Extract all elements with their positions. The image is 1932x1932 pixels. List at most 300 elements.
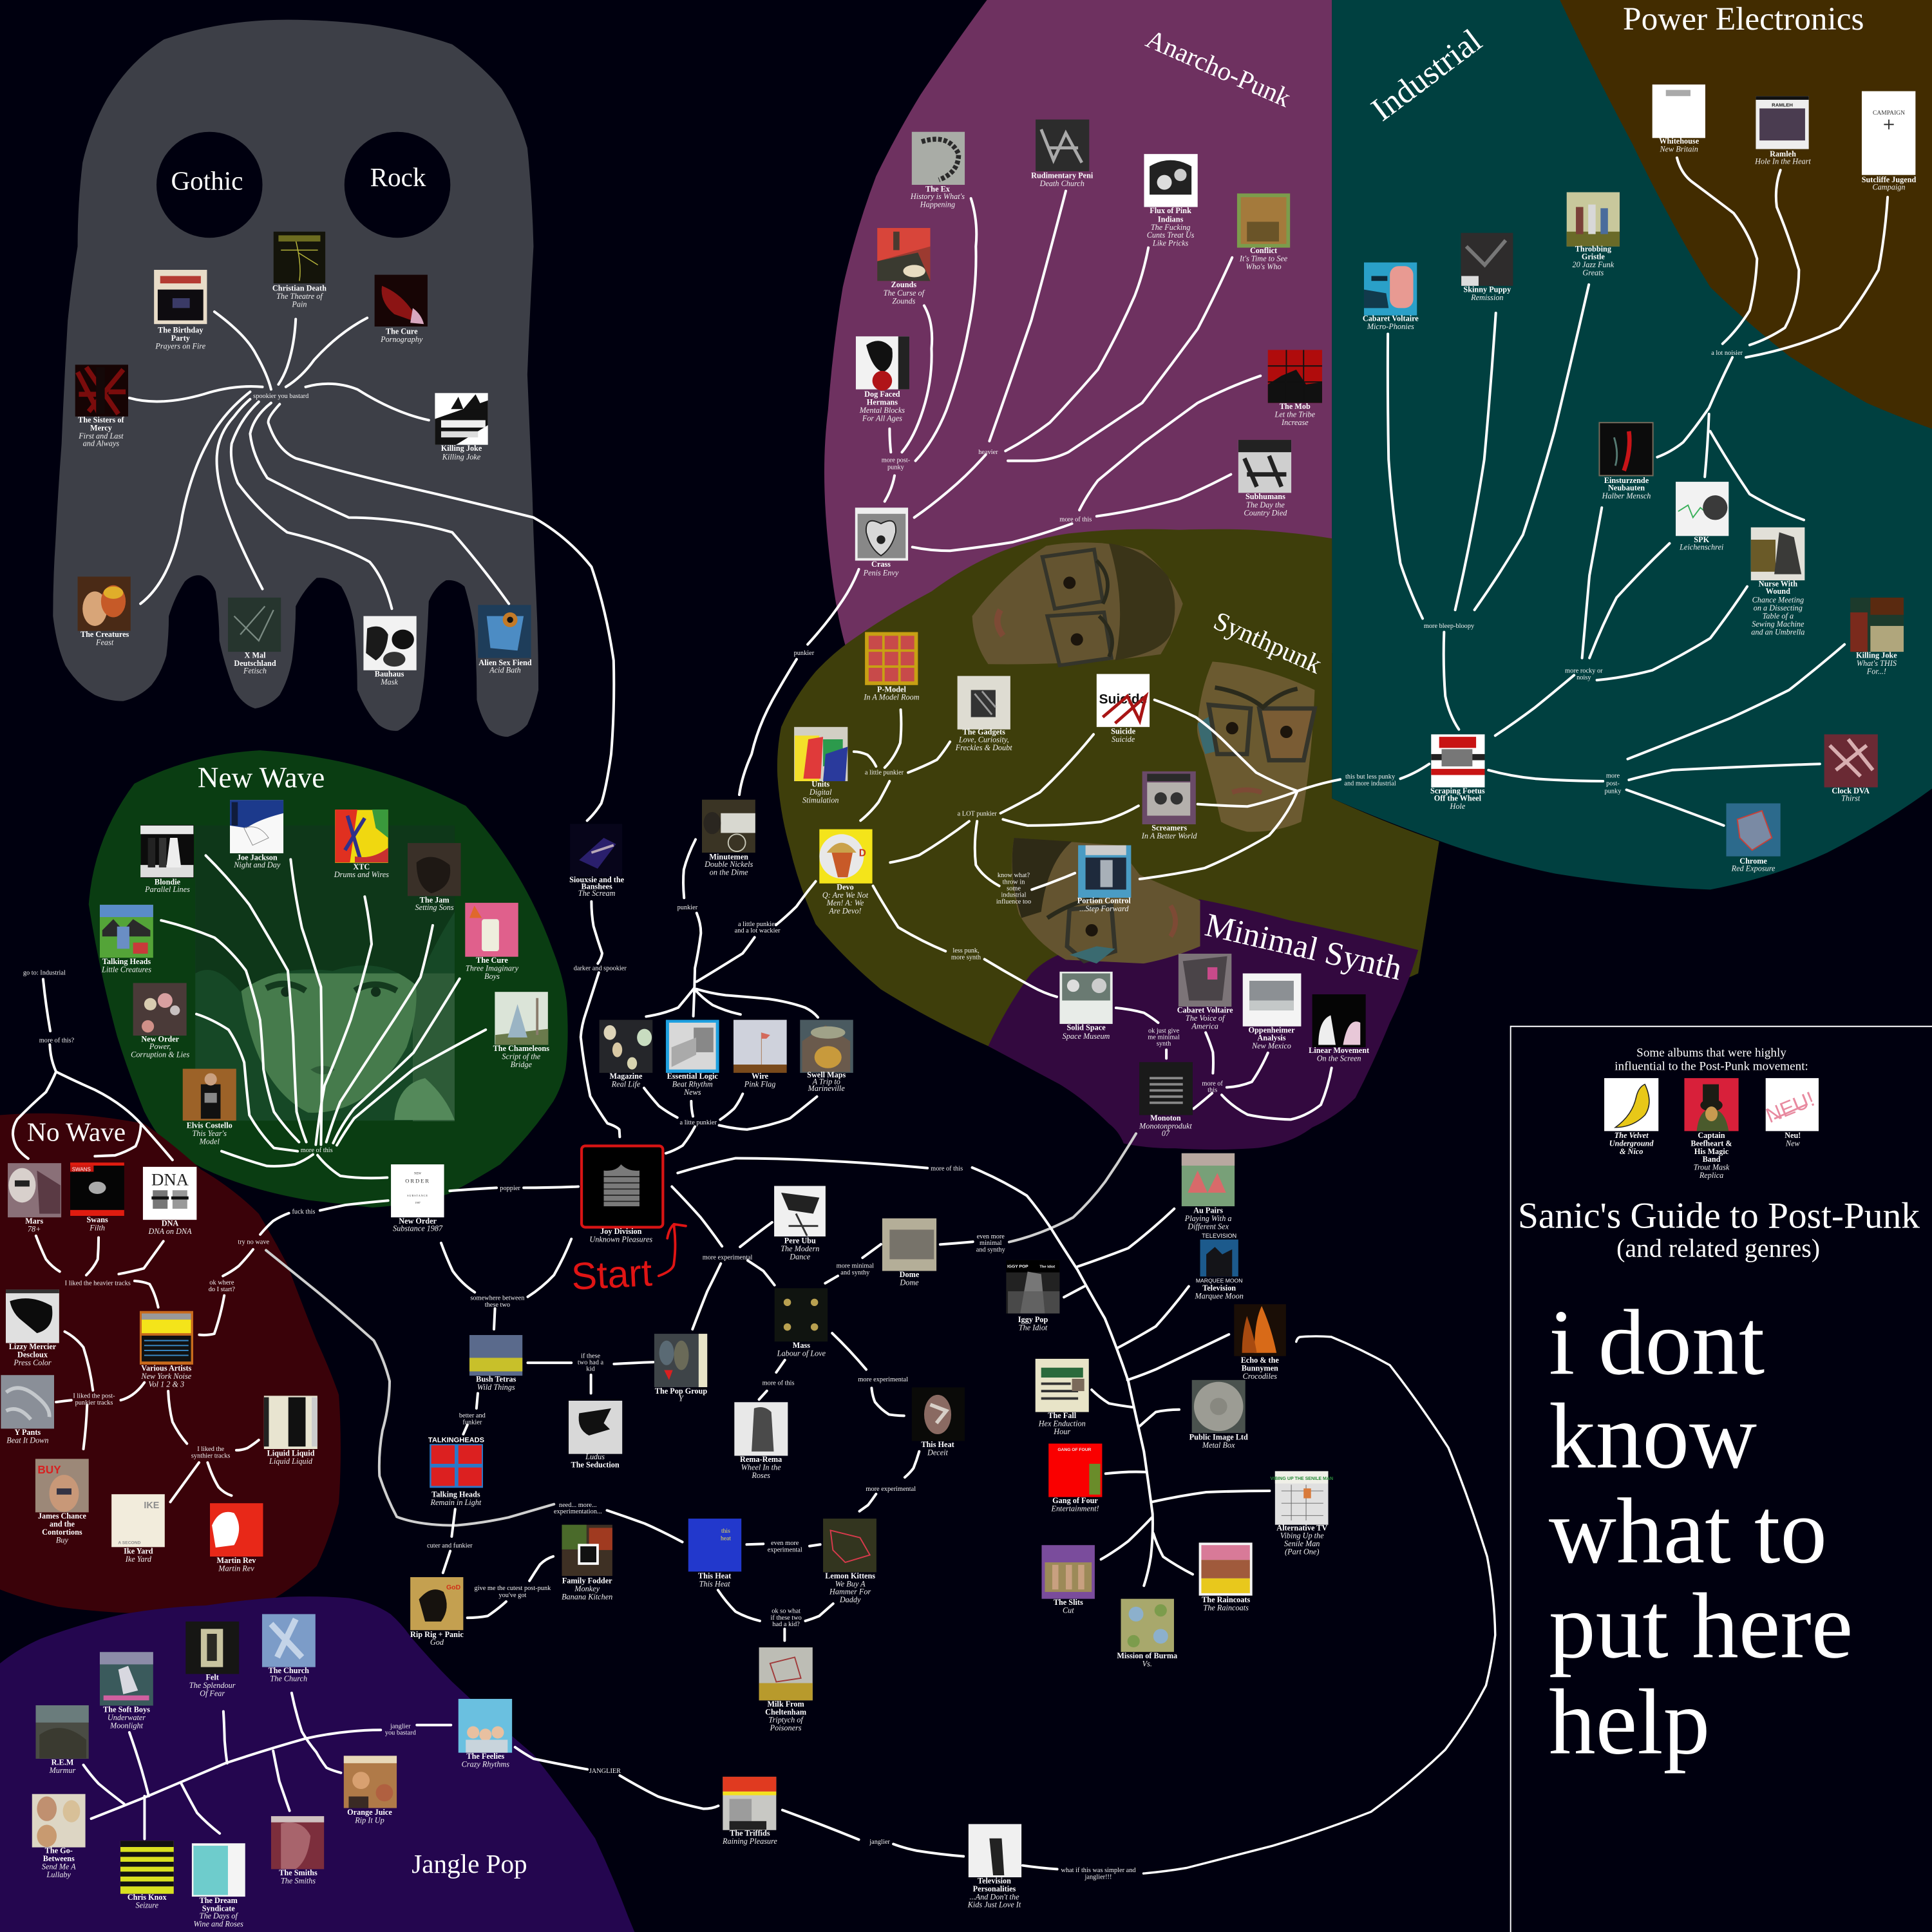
album: Y Pants: Y Pants	[15, 1428, 41, 1437]
album: Swell Maps	[800, 1020, 853, 1093]
album: Chris Knox: Chris Knox	[128, 1893, 167, 1902]
album: Suicide: Suicide	[1111, 726, 1136, 735]
album: Liquid Liquid: Liquid Liquid	[267, 1449, 315, 1458]
album: Neu!	[1763, 1078, 1819, 1148]
album: XTC	[334, 810, 389, 879]
album: Liquid Liquid: Liquid Liquid	[269, 1457, 313, 1466]
album: Rudimentary Peni: Rudimentary Peni	[1031, 171, 1094, 180]
album: X Mal Deutschland: Fetisch	[243, 667, 267, 676]
album: The Velvet Underground and Nico: The Velvet	[1615, 1131, 1649, 1140]
node: ok so what if these two had a kid?: ok so what	[772, 1607, 800, 1615]
album: Nurse With Wound: Chance Meeting	[1752, 596, 1804, 605]
heading: Industrial: Industrial	[1365, 23, 1488, 128]
album: Rip Rig + Panic: Rip Rig + Panic	[410, 1630, 464, 1639]
title: Sanic's Guide to Post-Punk	[1518, 1196, 1920, 1236]
album: Conflict: It's Time to See	[1239, 254, 1288, 263]
album: Christian Death: Christian Death	[272, 284, 327, 293]
album: Pere Ubu: Dance	[789, 1252, 811, 1261]
album: The Dream Syndicate: Syndicate	[202, 1904, 235, 1913]
panel: guide frame	[1511, 1027, 1932, 1932]
album: Alternative TV: (Part One)	[1285, 1548, 1319, 1557]
node: ok so what if these two had a kid?: if these two	[771, 1615, 802, 1622]
album: Gang of Four: Entertainment!	[1050, 1504, 1099, 1513]
album: Killing Joke, What's THIS For: For...!	[1866, 667, 1886, 676]
album: Dog Faced Hermans: Dog Faced	[864, 390, 900, 399]
album: The Fall: Hour	[1053, 1427, 1070, 1436]
node: a LOT punkier: a LOT punkier	[958, 811, 997, 818]
panel: jangle pop region	[0, 1596, 634, 1932]
album: Linear Movement: Linear Movement	[1309, 1046, 1370, 1055]
node: I liked the post-punkier tracks: I liked the post-	[73, 1393, 115, 1400]
node: I liked the heavier tracks: I liked the heavier tracks	[65, 1280, 131, 1287]
album: New Order, Substance 1987	[391, 1164, 444, 1233]
album: Ramleh	[1754, 96, 1811, 166]
album: Ramleh: Hole In the Heart	[1754, 156, 1811, 166]
album: Bush Tetras	[469, 1335, 522, 1392]
album: Joe Jackson	[230, 800, 283, 869]
album: Flux of Pink Indians: Indians	[1158, 214, 1184, 223]
album: Rema-Rema: Rema-Rema	[740, 1455, 782, 1464]
panel: minimal synth region	[988, 900, 1418, 1150]
album: Portion Control: Portion Control	[1077, 896, 1131, 905]
album: DNA: DNA on DNA	[147, 1227, 192, 1236]
text block: i dont know what to put here help: know	[1549, 1385, 1757, 1488]
album: Scraping Foetus Off the Wheel: Hole	[1449, 802, 1466, 811]
album: The Chameleons: Script of the	[502, 1052, 541, 1061]
album: The Sisters of Mercy: First and Last	[78, 431, 124, 440]
panel: anarcho-punk region	[824, 0, 1332, 653]
album: Linear Movement	[1309, 994, 1370, 1063]
connectors: new wave fan	[161, 855, 486, 1178]
album: P-Model: P-Model	[877, 685, 906, 694]
node: somewhere between these two: these two	[485, 1302, 510, 1309]
album: Flux of Pink Indians: Cunts Treat Us	[1147, 231, 1195, 240]
album: Scraping Foetus Off the Wheel	[1430, 734, 1485, 811]
node: less punk, more synth: more synth	[951, 954, 981, 961]
node: I liked the post-punkier tracks: punkier tracks	[75, 1399, 113, 1406]
node: need more experimentation: experimentation...	[554, 1508, 602, 1515]
album: Various Artists, New York Noise	[140, 1311, 193, 1388]
node: ok where do I start?: do I start?	[209, 1286, 235, 1293]
album: Skinny Puppy: Skinny Puppy	[1463, 285, 1511, 294]
album: Various Artists, New York Noise: Various Artists	[141, 1364, 192, 1373]
album: Devo: Are Devo!	[828, 907, 862, 916]
album: This Heat: this	[721, 1528, 730, 1535]
node: somewhere between these two: somewhere between	[470, 1294, 524, 1302]
album: Talking Heads, Little Creatures: Talking Heads	[102, 957, 151, 966]
album: Throbbing Gristle: 20 Jazz Funk	[1573, 260, 1615, 269]
album: Ludus, The Seduction: Ludus	[585, 1452, 605, 1461]
album: X Mal Deutschland: X Mal	[245, 651, 266, 660]
album: The Go-Betweens	[32, 1794, 86, 1879]
album: The Mob: The Mob	[1280, 402, 1311, 411]
album: Alternative TV	[1271, 1471, 1333, 1557]
album: Monoton: 07	[1162, 1129, 1170, 1138]
album: The Smiths: The Smiths	[279, 1868, 317, 1877]
album: Oppenheimer Analysis	[1243, 973, 1301, 1050]
album: The Soft Boys: Moonlight	[109, 1721, 144, 1730]
album: R.E.M. Murmur: R.E.M	[52, 1758, 74, 1767]
album: Zounds	[877, 228, 931, 306]
album: Christian Death	[272, 232, 327, 308]
node: give me the cutest post-punk you've got: you've got	[498, 1592, 526, 1599]
node: poppier: poppier	[500, 1185, 520, 1192]
illustration: ghost right eye hole	[345, 132, 450, 238]
node: know what? throw in some industrial influence too: know what?	[998, 872, 1030, 879]
album: The Cure, Pornography: Pornography	[380, 335, 423, 344]
album: Felt: The Splendour	[189, 1681, 236, 1690]
album: Swans, Filth: SWANS	[72, 1167, 91, 1173]
album: Units: Units	[811, 780, 829, 789]
album: Chrome: Chrome	[1739, 857, 1767, 866]
album: Milk From Cheltenham	[759, 1647, 813, 1732]
node: ok just give me minimal synth: synth	[1157, 1041, 1171, 1048]
heading: Power Electronics: Power Electronics	[1623, 1, 1864, 37]
album: Elvis Costello: This Year's	[192, 1129, 227, 1138]
node: if these two had a kid: kid	[586, 1366, 595, 1373]
album: The Feelies	[459, 1699, 512, 1769]
album: Mars: Mars	[25, 1217, 43, 1226]
album: Alternative TV: Alternative TV	[1276, 1523, 1327, 1532]
album: Sutcliffe Jugend	[1862, 91, 1917, 192]
connectors: anarcho-punk	[739, 191, 1260, 795]
album: The Gadgets: Love, Curiosity,	[958, 735, 1009, 744]
album: The Dream Syndicate: Wine and Roses	[193, 1919, 243, 1928]
album: Various Artists, New York Noise: New York Noise	[140, 1372, 192, 1381]
album: Martin Rev	[210, 1503, 263, 1573]
node: more experimental, central: more experimental	[703, 1254, 753, 1261]
album: The Sisters of Mercy: The Sisters of	[78, 415, 124, 424]
album: Milk From Cheltenham: Triptych of	[768, 1716, 804, 1725]
album: SPK	[1676, 482, 1728, 551]
album: Television, Marquee Moon: TELEVISION	[1202, 1233, 1236, 1239]
album: This Heat, Deceit: This Heat	[921, 1440, 955, 1449]
album: The Fall: Hex Enduction	[1038, 1419, 1086, 1428]
album: Joe Jackson: Joe Jackson	[237, 853, 278, 862]
panel: new wave region	[89, 750, 568, 1208]
album: Joy Division, starting point with red frame	[582, 1146, 663, 1244]
album: The Smiths	[271, 1816, 324, 1885]
subtitle: (and related genres)	[1616, 1235, 1820, 1263]
album: Public Image Ltd	[1189, 1380, 1248, 1450]
album: Killing Joke, What's THIS For	[1850, 598, 1904, 676]
connectors: synthpunk and minimal synth	[581, 700, 1340, 1153]
album: Suicide: Suicide	[1099, 692, 1147, 706]
panel: industrial region	[1332, 0, 1932, 889]
album: Clock DVA: Clock DVA	[1832, 786, 1870, 795]
album: Minutemen: Double Nickels	[704, 860, 753, 869]
album: Devo: Men! A: We	[826, 898, 864, 907]
album: The Birthday Party	[154, 270, 207, 350]
album: Subhumans: Subhumans	[1245, 492, 1285, 501]
album: Public Image Ltd: Metal Box	[1202, 1441, 1235, 1450]
heading: Jangle Pop: Jangle Pop	[412, 1849, 527, 1879]
album: The Sisters of Mercy: and Always	[83, 439, 119, 448]
album: The Raincoats: The Raincoats	[1202, 1595, 1250, 1604]
album: Au Pairs: Au Pairs	[1193, 1206, 1223, 1215]
album: Einsturzende Neubauten: Neubauten	[1608, 483, 1645, 492]
album: Screamers: In A Better World	[1141, 831, 1197, 840]
node: try no wave: try no wave	[238, 1238, 270, 1245]
album: Minutemen: Minutemen	[709, 853, 748, 862]
node: more post-punky: more post-	[882, 457, 910, 464]
album: Ike Yard: IKE	[144, 1501, 159, 1511]
node: more of this?: more of this?	[39, 1037, 75, 1045]
album: Chris Knox: Seizure	[135, 1901, 159, 1910]
album: Bauhaus, Mask: Mask	[380, 677, 398, 687]
album: Cabaret Voltaire, Micro-Phonies: Cabaret Voltaire	[1363, 314, 1419, 323]
album: Captain Beefheart	[1684, 1078, 1739, 1180]
album: James Chance and the Contortions: Contortions	[42, 1528, 82, 1537]
album: SPK: SPK	[1694, 535, 1710, 544]
album: Magazine	[600, 1020, 652, 1088]
album: Magazine: Real Life	[611, 1079, 641, 1088]
album: Dog Faced Hermans: Mental Blocks	[859, 406, 905, 415]
album: Mass: Mass	[793, 1341, 810, 1350]
node: less punk, more synth: less punk,	[952, 947, 980, 954]
node: more of this, minimal synth: more of	[1202, 1081, 1223, 1088]
album: Alternative TV: Senile Man	[1284, 1539, 1320, 1548]
album: Au Pairs	[1182, 1153, 1235, 1231]
album: The Feelies: Crazy Rhythms	[462, 1760, 509, 1769]
node: janglier you bastard: janglier	[390, 1723, 411, 1730]
node: more rocky or noisy: more rocky or	[1565, 668, 1603, 675]
album: Wire, Pink Flag: Wire	[752, 1072, 769, 1081]
album: Bauhaus, Mask	[363, 616, 417, 687]
album: Echo and the Bunnymen: Bunnymen	[1242, 1364, 1278, 1373]
album: The Dream Syndicate	[192, 1843, 245, 1928]
album: Liquid Liquid	[264, 1396, 317, 1466]
album: The Cure, Three Imaginary Boys: Three Imaginary	[466, 964, 519, 973]
album: Echo and the Bunnymen	[1234, 1304, 1286, 1381]
album: This Heat	[688, 1519, 741, 1588]
album: DNA	[143, 1167, 196, 1236]
album: Captain Beefheart: His Magic	[1694, 1147, 1729, 1156]
album: P-Model: In A Model Room	[863, 693, 920, 702]
album: New Order, Substance 1987: ORDER	[405, 1178, 430, 1184]
connectors: central map	[441, 1158, 1495, 1873]
album: Portion Control: ...Step Forward	[1079, 904, 1129, 913]
node: know what? throw in some industrial influence too: throw in	[1003, 878, 1025, 886]
album: Ike Yard: A SECOND	[118, 1540, 141, 1545]
album: This Heat, Deceit	[912, 1387, 965, 1457]
album: James Chance and the Contortions	[35, 1459, 89, 1544]
album: Dome: Dome	[900, 1270, 920, 1279]
album: The Jam: Setting Sons	[415, 903, 454, 912]
album: The Soft Boys: The Soft Boys	[103, 1705, 150, 1714]
heading: New Wave: New Wave	[198, 762, 325, 794]
album: Bush Tetras: Wild Things	[477, 1383, 515, 1392]
node: more of this, anarcho: more of this	[1059, 516, 1092, 523]
album: Killing Joke: Killing Joke	[442, 453, 481, 462]
album: Clock DVA	[1824, 734, 1878, 803]
album: The Chameleons: The Chameleons	[493, 1044, 549, 1053]
album: Magazine: Magazine	[609, 1072, 643, 1081]
album: Sutcliffe Jugend: CAMPAIGN	[1873, 109, 1905, 117]
album: Siouxsie and the Banshees	[569, 824, 625, 898]
panel: ghost-shaped gothic rock region	[53, 20, 538, 737]
album: Einsturzende Neubauten	[1599, 422, 1653, 500]
album: Mass	[775, 1288, 828, 1358]
node: more experimental, third: more experimental	[866, 1486, 916, 1493]
node: spookier you bastard: spookier you bastard	[253, 393, 309, 400]
node: ok just give me minimal synth: ok just give	[1148, 1027, 1179, 1034]
album: Ike Yard: Ike Yard	[125, 1555, 152, 1564]
node: need more experimentation: need... more...	[559, 1502, 597, 1509]
album: Captain Beefheart: Trout Mask	[1694, 1163, 1730, 1172]
album: The Church: The Church	[269, 1666, 309, 1675]
album: Oppenheimer Analysis: New Mexico	[1251, 1041, 1291, 1050]
album: Zounds: The Curse of	[884, 289, 925, 298]
album: The Chameleons	[493, 992, 549, 1069]
album: New Order, Substance 1987: NEW	[414, 1172, 422, 1175]
album: Killing Joke, What's THIS For: Killing Joke	[1856, 651, 1897, 660]
album: Rema-Rema: Roses	[751, 1471, 770, 1480]
album: Family Fodder: Monkey	[574, 1584, 600, 1593]
node: darker and spookier: darker and spookier	[574, 965, 627, 972]
album: Alien Sex Fiend, Acid Bath: Alien Sex Fiend	[478, 658, 532, 667]
album: Nurse With Wound: Table of a	[1763, 611, 1794, 620]
connectors: gothic rock	[129, 312, 614, 820]
album: Dome	[882, 1218, 936, 1287]
album: This Heat: This Heat	[698, 1571, 732, 1580]
album: The Triffids: Raining Pleasure	[722, 1837, 777, 1846]
album: Neu!: NEU!	[1763, 1087, 1817, 1128]
album: Skinny Puppy: Remission	[1470, 293, 1503, 302]
node: a litte punkier: a litte punkier	[680, 1119, 717, 1126]
album: The Slits: The Slits	[1054, 1598, 1083, 1607]
album: James Chance and the Contortions: Buy	[56, 1535, 69, 1544]
album: Essential Logic	[666, 1020, 719, 1097]
panel: power electronics region	[1560, 0, 1932, 429]
node: heavier: heavier	[978, 449, 998, 456]
album: Dog Faced Hermans: Hermans	[867, 398, 898, 407]
album: Subhumans: The Day the	[1246, 500, 1285, 509]
album: This Heat: heat	[721, 1535, 731, 1542]
album: Joe Jackson: Night and Day	[233, 860, 281, 869]
album: The Go-Betweens: Lullaby	[46, 1870, 71, 1879]
album: The Creatures, Feast: Feast	[95, 638, 114, 647]
node: punkier from Crass: punkier	[794, 650, 815, 657]
album: Nurse With Wound: and an Umbrella	[1751, 627, 1804, 636]
illustration: ghost left eye hole	[156, 132, 263, 238]
text block: i dont know what to put here help: help	[1549, 1671, 1710, 1774]
node: better and funkier: funkier	[462, 1419, 482, 1426]
album: Family Fodder: Banana Kitchen	[562, 1592, 612, 1601]
album: Rudimentary Peni	[1031, 120, 1094, 188]
album: Captain Beefheart: Replica	[1699, 1171, 1723, 1180]
node: more of this, new wave: more of this	[301, 1147, 333, 1154]
node: even more minimal and synthy: and synthy	[976, 1246, 1006, 1253]
album: Lizzy Mercier Descloux: Press Color	[13, 1358, 52, 1367]
callout: Start: Start	[571, 1251, 654, 1298]
album: Sutcliffe Jugend: Sutcliffe Jugend	[1862, 175, 1917, 184]
node: cuter and funkier: cuter and funkier	[427, 1542, 473, 1549]
album: Iggy Pop, The Idiot: Iggy Pop	[1018, 1315, 1048, 1324]
album: Monoton	[1139, 1062, 1193, 1138]
album: Martin Rev: Martin Rev	[218, 1564, 254, 1573]
node: a lot noisier: a lot noisier	[1711, 350, 1743, 357]
connector: long gray path from try no wave to need more experimentation	[266, 1250, 554, 1526]
album: James Chance and the Contortions: James Chance	[38, 1511, 87, 1520]
album: Orange Juice: Orange Juice	[347, 1808, 392, 1817]
album: Suicide	[1097, 674, 1150, 744]
album: Lemon Kittens: Daddy	[839, 1595, 861, 1604]
node: this but less punky and more industrial: and more industrial	[1344, 781, 1396, 788]
album: The Fall: The Fall	[1048, 1411, 1077, 1420]
connectors: jangle pop	[84, 1693, 451, 1839]
album: Chris Knox	[120, 1841, 174, 1910]
node: if these two had a kid: if these	[581, 1352, 600, 1359]
album: Solid Space	[1059, 972, 1113, 1041]
node: a little punkier and a lot wackier: a little punkier	[738, 921, 777, 928]
album: The Creatures, Feast: The Creatures	[80, 630, 129, 639]
album: Joy Division, starting point with red frame: Unknown Pleasures	[589, 1235, 652, 1244]
album: Mission of Burma: Mission of Burma	[1117, 1651, 1177, 1660]
album: Swell Maps: A Trip to	[812, 1077, 840, 1086]
album: Various Artists, New York Noise: Vol 1 2 & 3	[148, 1379, 184, 1388]
album: Nurse With Wound: Nurse With	[1759, 580, 1797, 589]
album: The Mob: Increase	[1281, 418, 1309, 427]
album: Nurse With Wound: on a Dissecting	[1754, 603, 1803, 612]
album: Television Personalities: ...And Don't the	[969, 1892, 1019, 1901]
album: Screamers: Screamers	[1151, 824, 1187, 833]
album: Scraping Foetus Off the Wheel: Off the Wheel	[1434, 794, 1482, 803]
album: Au Pairs: Playing With a	[1184, 1214, 1232, 1223]
text block: i dont know what to put here help: i dont	[1549, 1291, 1765, 1394]
album: The Creatures, Feast	[78, 576, 131, 647]
album: Neu!: Neu!	[1785, 1131, 1801, 1140]
album: The Raincoats: The Raincoats	[1204, 1604, 1249, 1613]
album: Christian Death: Pain	[291, 299, 307, 308]
album: Talking Heads, Remain in Light: TALKINGHEADS	[428, 1436, 484, 1444]
album: Flux of Pink Indians: The Fucking	[1151, 223, 1190, 232]
node: even more experimental: even more	[771, 1540, 799, 1547]
heading: Gothic: Gothic	[171, 166, 243, 196]
album: Flux of Pink Indians: Flux of Pink	[1150, 206, 1191, 215]
album: The Ex: The Ex	[925, 185, 951, 194]
album: Crass, Penis Envy: Penis Envy	[863, 568, 899, 577]
album: Chrome	[1726, 803, 1781, 873]
album: The Dream Syndicate: The Dream	[200, 1896, 238, 1905]
node: more of this, main line: more of this	[931, 1166, 963, 1173]
album: Ike Yard: Ike Yard	[124, 1547, 153, 1556]
album: Einsturzende Neubauten: Halber Mensch	[1602, 491, 1651, 500]
album: The Slits	[1041, 1545, 1095, 1615]
album: Essential Logic: Beat Rhythm	[672, 1079, 713, 1088]
album: Milk From Cheltenham: Poisoners	[770, 1723, 802, 1732]
album: The Fall	[1036, 1359, 1089, 1436]
album: Screamers	[1141, 772, 1197, 840]
album: Family Fodder: Family Fodder	[562, 1577, 612, 1586]
album: The Pop Group: Y	[679, 1394, 684, 1403]
album: Minutemen: on the Dime	[710, 867, 748, 876]
album: Ramleh: RAMLEH	[1772, 102, 1793, 108]
album: Whitehouse: New Britain	[1659, 144, 1698, 153]
album: Mission of Burma	[1117, 1599, 1177, 1669]
album: Killing Joke: Killing Joke	[441, 444, 482, 453]
album: Siouxsie and the Banshees: The Scream	[578, 889, 616, 898]
album: Throbbing Gristle: Throbbing	[1575, 244, 1611, 253]
album: The Velvet Underground and Nico	[1604, 1078, 1658, 1156]
album: Milk From Cheltenham: Cheltenham	[765, 1707, 806, 1716]
node: if these two had a kid: two had a	[578, 1359, 604, 1367]
album: Portion Control	[1077, 845, 1131, 913]
node: give me the cutest post-punk you've got: give me the cutest post-punk	[475, 1585, 551, 1592]
album: Captain Beefheart: Band	[1703, 1155, 1721, 1164]
album: The Church	[262, 1614, 316, 1683]
album: The Dream Syndicate: The Days of	[200, 1911, 238, 1920]
